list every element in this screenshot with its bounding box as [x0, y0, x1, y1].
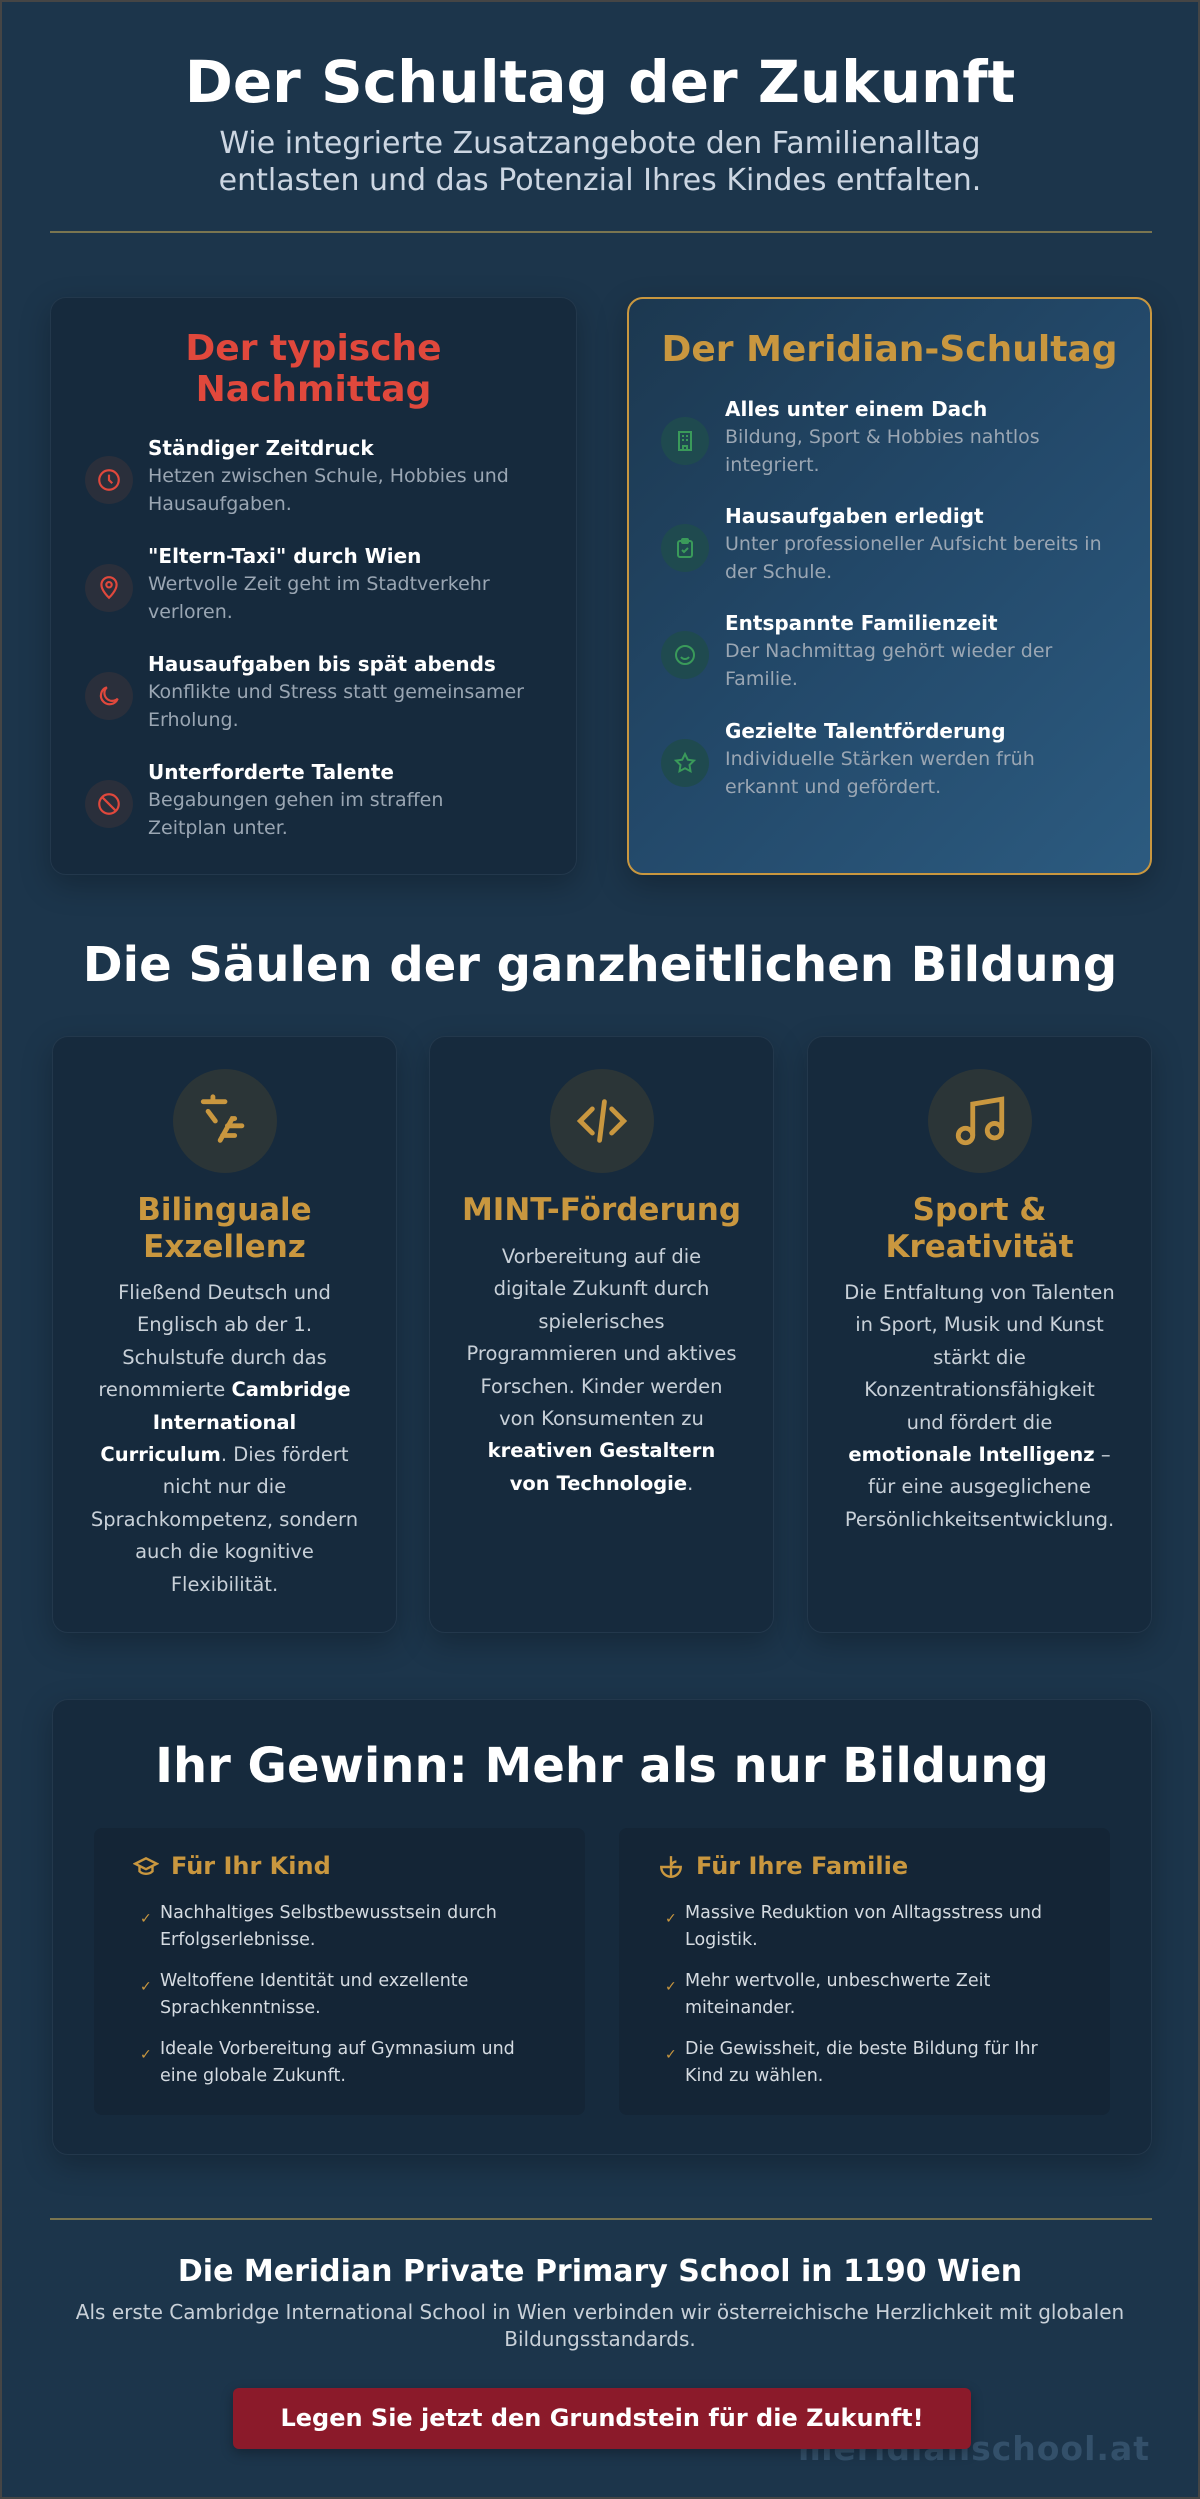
item: Zeitdruck: Ständiger Zeitdruck: [148, 436, 374, 460]
pillar: bilingual: [52, 1036, 397, 1633]
card: family: Die Gewissheit, die beste Bildung für Ihr Kind zu wählen.: [685, 2039, 1038, 2086]
pillar text: Fließend Deutsch und Englisch ab der 1. Schulstufe durch das renommierte Cambridge International Curriculum. Dies fördert nicht nur die Sprachkompetenz, sondern auch die kognitive Flexibilität.: [91, 1281, 358, 1596]
item: Hausaufgaben spät: Konflikte und Stress statt gemeinsamer Erholung.: [148, 681, 524, 731]
item: Hausaufgaben: Hausaufgaben erledigt: [725, 504, 984, 528]
icon: smile: [661, 631, 709, 679]
heading: family with icon: Für Ihre Familie: [696, 1852, 908, 1880]
card: family: [619, 1828, 1110, 2115]
list: family: Massive Reduktion von Alltagsstress und Logistik.: [685, 1903, 1042, 1950]
pillar heading: Bilinguale: [137, 1192, 312, 1228]
footer text: Als erste Cambridge International School in Wien verbinden wir österreichische Herzlichkeit mit globalen Bildungsstandards.: [76, 2300, 1124, 2351]
item: Zeitdruck: [85, 436, 509, 515]
pillar text: spielerisches: [538, 1310, 665, 1333]
CTA button: [233, 2388, 971, 2449]
item: Familienzeit: [661, 611, 1052, 690]
item: Eltern-Taxi: "Eltern-Taxi" durch Wien: [148, 544, 421, 568]
icon: map pin: [85, 564, 133, 612]
item: Hausaufgaben: Unter professioneller Aufsicht bereits in der Schule.: [725, 533, 1102, 583]
subtitle: Wie integrierte Zusatzangebote den Familienalltag: [219, 126, 981, 161]
pillar heading: [137, 1192, 312, 1265]
pillar text: kreativen Gestaltern: [488, 1439, 715, 1462]
item: Talentförderung: Gezielte Talentförderung: [725, 719, 1006, 743]
icon: building: [661, 417, 709, 465]
item: Zeitdruck: Hetzen zwischen Schule, Hobbies und Hausaufgaben.: [148, 465, 509, 515]
icon: ban: [85, 780, 133, 828]
item: Dach: Bildung, Sport & Hobbies nahtlos integriert.: [725, 426, 1040, 476]
heading: Meridian: Der Meridian-Schultag: [661, 329, 1118, 370]
icon: music: [928, 1069, 1032, 1173]
heading: typical afternoon: [185, 328, 442, 410]
panel: Meridian school day: [627, 297, 1152, 875]
heading: typical afternoon: Der typische: [185, 328, 442, 369]
item: Dach: Alles unter einem Dach: [725, 397, 987, 421]
pillar text: Programmieren und aktives: [466, 1342, 737, 1365]
pillar text: [844, 1281, 1115, 1531]
pillar text: emotionale Intelligenz – für eine ausgeglichene Persönlichkeitsentwicklung.: [845, 1443, 1114, 1531]
section heading: pillars: Die Säulen der ganzheitlichen Bildung: [83, 937, 1117, 993]
pillar text: Vorbereitung auf die: [502, 1245, 701, 1268]
item: Familienzeit: Entspannte Familienzeit: [725, 611, 998, 635]
subtitle: entlasten und das Potenzial Ihres Kindes entfalten.: [219, 163, 981, 198]
pillar text: von Konsumenten zu: [499, 1407, 704, 1430]
item: Talente: [85, 760, 443, 839]
icon: star: [661, 739, 709, 787]
CTA button: Legen Sie jetzt den Grundstein für die Zukunft!: [280, 2404, 924, 2432]
item: Talentförderung: Individuelle Stärken werden früh erkannt und gefördert.: [725, 748, 1035, 798]
pillar heading: Exzellenz: [143, 1229, 306, 1265]
icon: moon: [85, 672, 133, 720]
list: child: Nachhaltiges Selbstbewusstsein durch Erfolgserlebnisse.: [160, 1903, 497, 1950]
heading: child with icon: Für Ihr Kind: [171, 1852, 331, 1880]
pillar heading: [885, 1192, 1074, 1265]
panel: benefits: [52, 1699, 1152, 2155]
pillar text: von Technologie.: [510, 1472, 693, 1495]
item: Familienzeit: Der Nachmittag gehört wieder der Familie.: [725, 640, 1052, 690]
title: Der Schultag der Zukunft: [185, 48, 1015, 116]
pillar text: Die Entfaltung von Talenten in Sport, Musik und Kunst stärkt die Konzentrationsfähigkeit: [844, 1281, 1115, 1401]
pillar: MINT: [429, 1036, 774, 1633]
pillar text: und fördert die: [907, 1411, 1052, 1434]
heading: typical afternoon: Nachmittag: [196, 369, 431, 410]
pillar heading: Kreativität: [885, 1229, 1074, 1265]
card: child: Ideale Vorbereitung auf Gymnasium und eine globale Zukunft.: [160, 2039, 515, 2086]
pillar: sport: [807, 1036, 1152, 1633]
item: Talente: Unterforderte Talente: [148, 760, 394, 784]
item: Dach: [661, 397, 1040, 476]
icon: code: [550, 1069, 654, 1173]
pillar text: Forschen. Kinder werden: [480, 1375, 722, 1398]
item: Talentförderung: [661, 719, 1035, 798]
item: Hausaufgaben spät: [85, 652, 524, 731]
item: Eltern-Taxi: Wertvolle Zeit geht im Stadtverkehr verloren.: [148, 573, 490, 623]
icon: clipboard: [661, 524, 709, 572]
pillar text: digitale Zukunft durch: [494, 1277, 709, 1300]
pillar heading: Sport &: [913, 1192, 1046, 1228]
item: Hausaufgaben: [661, 504, 1102, 583]
watermark: meridianschool.at: [798, 2429, 1150, 2468]
card: child: Weltoffene Identität und exzellente Sprachkenntnisse.: [160, 1971, 468, 2018]
card: child: [94, 1828, 585, 2115]
icon: clock: [85, 456, 133, 504]
pillar text: [466, 1245, 737, 1495]
item: Eltern-Taxi: [85, 544, 490, 623]
item: Hausaufgaben spät: Hausaufgaben bis spät abends: [148, 652, 496, 676]
panel: typical afternoon: [50, 297, 577, 875]
subtitle: [219, 126, 981, 198]
icon: translate: [172, 1069, 276, 1173]
pillar heading: MINT-Förderung: [462, 1192, 741, 1228]
footer heading: Die Meridian Private Primary School in 1190 Wien: [178, 2254, 1022, 2289]
item: Talente: Begabungen gehen im straffen Zeitplan unter.: [148, 789, 443, 839]
card: family: Mehr wertvolle, unbeschwerte Zeit miteinander.: [685, 1971, 990, 2018]
heading: benefits: Ihr Gewinn: Mehr als nur Bildung: [155, 1738, 1049, 1794]
